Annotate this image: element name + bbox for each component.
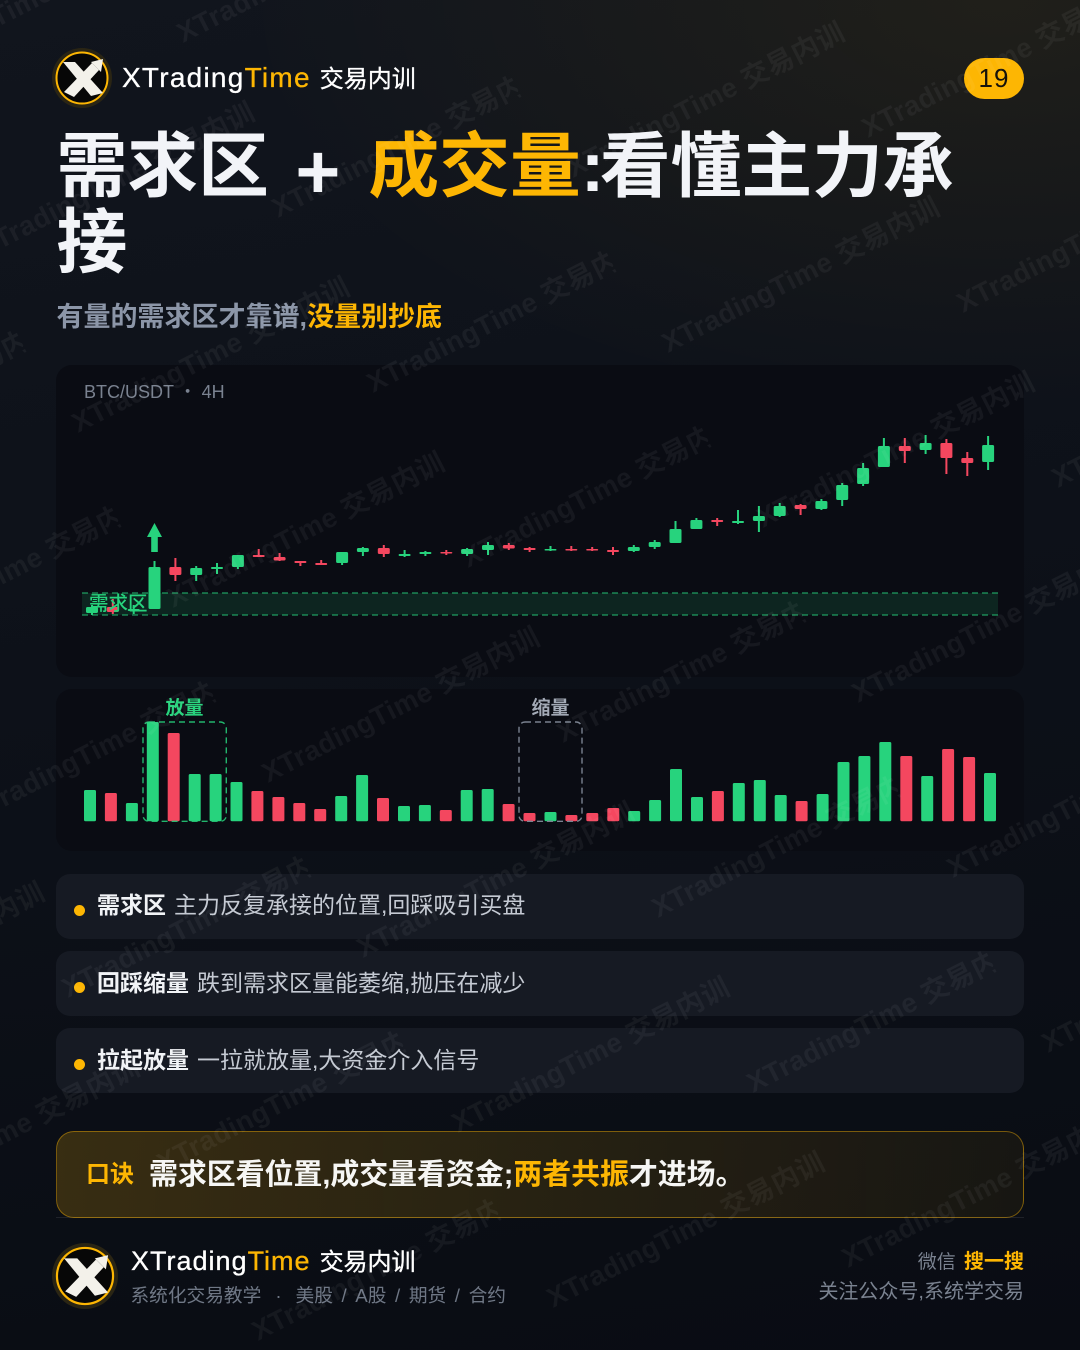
- point text: 需求区 主力反复承接的位置,回踩吸引买盘: [97, 892, 525, 918]
- watermark layer: XTradingTime 交易内训: [552, 581, 840, 748]
- title: 接: [56, 204, 127, 282]
- bullet: [74, 1059, 85, 1070]
- page number badge: [964, 58, 1024, 99]
- watermark layer: XTradingTime 交易内训: [657, 191, 945, 358]
- panel: point demand zone: [56, 874, 1024, 939]
- watermark layer: XTradingTime 交易内训: [352, 796, 640, 963]
- chart symbol label: BTC/USDT ・ 4H: [84, 382, 225, 402]
- watermark layer: XTradingTime 交易内训: [542, 1146, 830, 1313]
- watermark layer: XTradingTime 交易内训: [162, 446, 450, 613]
- watermark layer: XTradingTime 交易内训: [457, 406, 745, 573]
- point text: 回踩缩量 跌到需求区量能萎缩,抛压在减少: [97, 970, 525, 996]
- watermark layer: XTradingTime 交易内训: [742, 931, 1030, 1098]
- header brand: [52, 48, 416, 108]
- panel: candlestick chart: [56, 365, 1024, 677]
- high volume highlight: 放量: [166, 697, 204, 719]
- footer brand name: XTradingTime 交易内训: [131, 1246, 416, 1276]
- watermark layer: XTradingTime 交易内训: [57, 836, 345, 1003]
- point text: 拉起放量 一拉就放量,大资金介入信号: [97, 1047, 479, 1073]
- callout text: 需求区看位置,成交量看资金;两者共振才进场。: [149, 1159, 744, 1191]
- low volume highlight: 缩量: [532, 696, 570, 719]
- watermark layer: XTradingTime 交易内训: [447, 971, 735, 1138]
- footer divider: [56, 1217, 1024, 1218]
- demand zone band: [82, 593, 998, 615]
- candlestick chart: [82, 435, 998, 616]
- watermark layer: XTradingTime 交易内训: [562, 16, 850, 183]
- footer brand: [52, 1243, 506, 1309]
- watermark layer: XTradingTime 交易内训: [752, 366, 1040, 533]
- footer tagline: 系统化交易教学 · 美股 / A股 / 期货 / 合约: [130, 1285, 506, 1306]
- bullet: [74, 905, 85, 916]
- watermark layer: XTradingTime 交易内训: [267, 56, 555, 223]
- icon: logo: [52, 48, 112, 108]
- high volume highlight: [143, 697, 226, 821]
- subtitle: 有量的需求区才靠谱,没量别抄底: [56, 302, 442, 332]
- title: [56, 128, 954, 282]
- watermark layer: XTradingTime 交易内训: [647, 756, 935, 923]
- arrow: up signal: [147, 523, 162, 552]
- panel: point rally volume: [56, 1028, 1024, 1093]
- wechat search line: 微信 搜一搜: [918, 1251, 1024, 1273]
- footer call to action: [818, 1250, 1024, 1303]
- watermark layer: XTradingTime 交易内训: [362, 231, 650, 398]
- demand zone label: 需求区: [89, 593, 148, 615]
- candles: [86, 435, 994, 615]
- brand name: XTradingTime 交易内训: [122, 62, 416, 93]
- follow line: 关注公众号,系统学交易: [818, 1281, 1024, 1303]
- watermark layer: XTradingTime 交易内训: [247, 1179, 535, 1346]
- volume bar chart: [84, 696, 996, 822]
- callout label: 口诀: [86, 1161, 134, 1188]
- panel: volume chart: [56, 689, 1024, 851]
- page number badge: 19: [979, 63, 1009, 93]
- bullet: [74, 982, 85, 993]
- panel: point pullback shrink: [56, 951, 1024, 1016]
- watermark layer: XTradingTime 交易内训: [257, 621, 545, 788]
- volume bars: [84, 722, 996, 821]
- low volume highlight: [519, 696, 582, 821]
- title: 需求区 + 成交量:看懂主力承: [56, 128, 954, 215]
- watermark layer: XTradingTime 交易内训: [152, 1011, 440, 1178]
- icon: footer logo: [52, 1243, 118, 1309]
- callout: mantra: [56, 1131, 1024, 1218]
- watermark layer: XTradingTime 交易内训: [67, 271, 355, 438]
